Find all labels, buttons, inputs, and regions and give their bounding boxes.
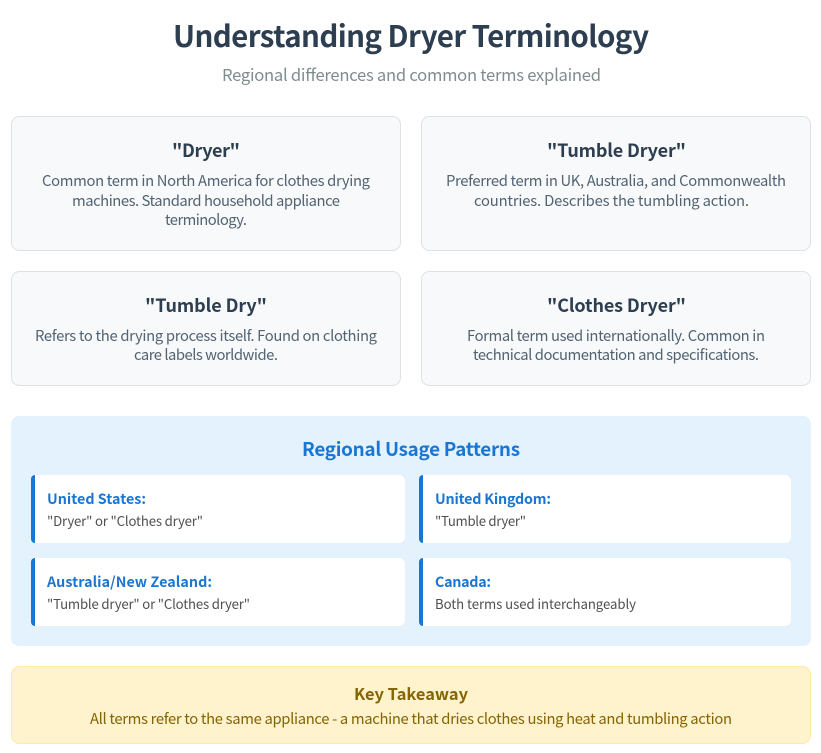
- title: Understanding Dryer Terminology: [173, 14, 649, 56]
- text block: Clothes Dryer description: [467, 325, 765, 365]
- region: United States: United States:: [47, 488, 146, 509]
- heading: Tumble Dry: "Tumble Dry": [145, 292, 267, 318]
- text block: Tumble Dryer description: countries. Describes the tumbling action.: [474, 190, 749, 211]
- callout text: All terms refer to the same appliance - a machine that dries clothes using heat and tumbling action: [90, 708, 732, 729]
- callout: key takeaway: [12, 666, 810, 744]
- heading: Tumble Dryer: "Tumble Dryer": [547, 137, 686, 163]
- text block: Dryer description: terminology.: [165, 209, 247, 230]
- heading: regional usage: Regional Usage Patterns: [302, 435, 520, 462]
- text block: Dryer description: Common term in North America for clothes drying: [42, 170, 371, 191]
- text block: Dryer description: [42, 170, 371, 230]
- region: Canada: [419, 558, 791, 626]
- region: United Kingdom: [419, 475, 791, 543]
- region: United States: [31, 475, 405, 543]
- text block: Dryer description: machines. Standard household appliance: [72, 190, 340, 211]
- heading: Dryer: "Dryer": [172, 137, 240, 163]
- panel: regional usage patterns: [11, 416, 811, 646]
- region: United Kingdom: United Kingdom:: [435, 488, 551, 509]
- text block: Clothes Dryer description: technical documentation and specifications.: [473, 344, 759, 365]
- text block: Tumble Dry description: [35, 325, 378, 365]
- text block: Clothes Dryer description: Formal term used internationally. Common in: [467, 325, 765, 346]
- callout heading: Key Takeaway: [354, 681, 469, 705]
- heading: Clothes Dryer: "Clothes Dryer": [547, 292, 686, 318]
- region: Australia/New Zealand: Australia/New Zealand:: [46, 571, 212, 592]
- subtitle: Regional differences and common terms explained: [222, 62, 601, 86]
- region: United States: "Dryer" or "Clothes dryer": [47, 511, 203, 530]
- region: Australia/New Zealand: "Tumble dryer" or "Clothes dryer": [47, 594, 250, 613]
- region: Australia/New Zealand: [31, 558, 405, 626]
- region: Canada: Both terms used interchangeably: [435, 594, 636, 613]
- panel: Dryer: [12, 116, 400, 250]
- text block: Tumble Dry description: Refers to the drying process itself. Found on clothing: [35, 325, 378, 346]
- text block: Tumble Dryer description: [446, 170, 786, 211]
- text block: Tumble Dryer description: Preferred term in UK, Australia, and Commonwealth: [446, 170, 786, 191]
- text block: Tumble Dry description: care labels worldwide.: [134, 344, 278, 365]
- panel: Tumble Dryer: [422, 116, 810, 250]
- region: United Kingdom: "Tumble dryer": [435, 511, 526, 530]
- panel: Clothes Dryer: [422, 272, 810, 386]
- panel: Tumble Dry: [12, 272, 400, 386]
- region: Canada: Canada:: [435, 571, 491, 592]
